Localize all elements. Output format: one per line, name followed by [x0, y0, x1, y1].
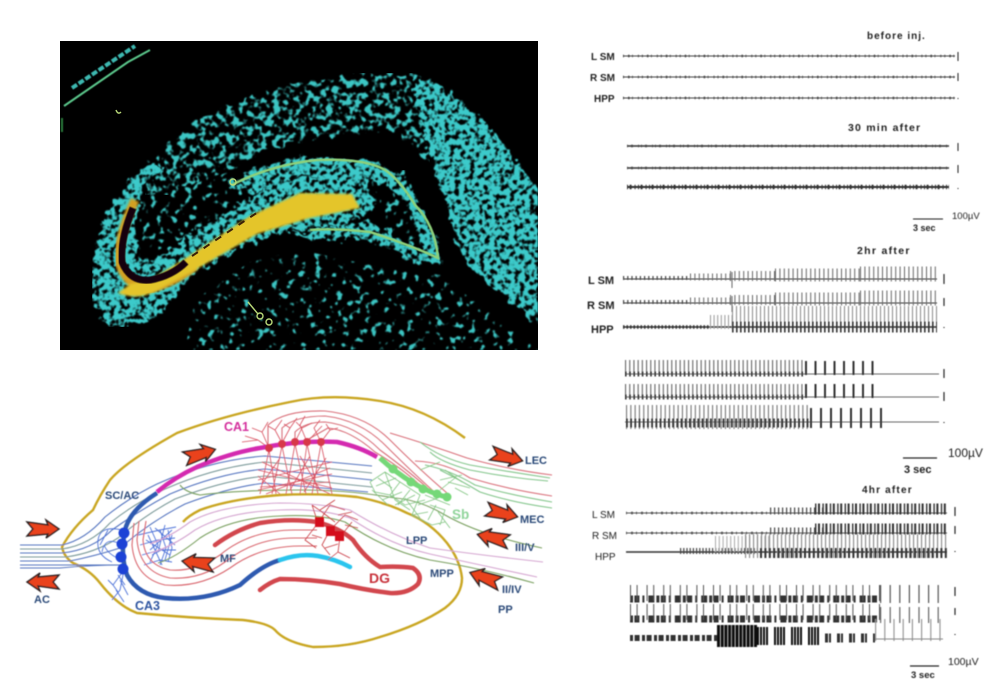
diagram: subiculum dendrites — [370, 462, 470, 528]
scale bar: 100µV — [952, 211, 980, 222]
diagram: CA3 basal dendrites — [98, 525, 176, 602]
micrograph: sparse speckled tissue — [138, 170, 538, 350]
channel labels: L SM — [591, 52, 615, 63]
micrograph: orange rim around dark core — [119, 200, 195, 288]
diagram labels: SC/AC — [105, 490, 139, 502]
section: 30 min after — [627, 122, 980, 233]
calibration ticks — [957, 52, 959, 99]
diagram labels: PP — [498, 604, 513, 616]
micrograph: small vessel rings — [116, 110, 272, 325]
HPP trace — [623, 319, 937, 327]
diagram labels: MEC — [520, 514, 544, 526]
heading: before inj.: before inj. — [867, 31, 926, 42]
diagram: CA3 blue band — [123, 493, 280, 599]
diagram labels: II/IV — [502, 584, 522, 596]
diagram labels: LPP — [406, 535, 427, 547]
continuation traces — [630, 593, 943, 639]
L SM trace — [626, 509, 947, 513]
L SM trace — [623, 272, 937, 288]
diagram labels: III/V — [515, 542, 535, 554]
R SM trace — [626, 529, 947, 533]
channel labels — [590, 52, 615, 105]
heading: 4hr after: 4hr after — [862, 485, 913, 496]
diagram: CA1 pyramidal dendrites — [242, 416, 338, 494]
arrow: AC output — [27, 573, 59, 591]
scale bar: 100µV — [948, 656, 979, 668]
diagram labels: MPP — [430, 568, 454, 580]
continuation traces — [625, 367, 939, 423]
diagram: CA3 cell bodies — [116, 528, 130, 574]
arrow: MEC — [484, 500, 520, 526]
diagram: subiculum cell bodies — [388, 464, 452, 502]
traces — [627, 146, 949, 187]
diagram: perforant path fibres, pink and green — [150, 485, 543, 583]
diagram: subiculum green band — [380, 458, 450, 498]
channel labels: HPP — [591, 324, 614, 336]
channel labels: R SM — [590, 73, 615, 84]
diagram: dentate granule cell dendrites — [305, 500, 358, 560]
diagram labels: Sb — [452, 507, 469, 522]
calibration ticks — [954, 507, 956, 552]
arrow: left input — [27, 520, 59, 538]
diagram: commissural and Schaffer fibres — [20, 456, 372, 568]
calibration ticks — [954, 587, 956, 635]
micrograph: dark saturated core — [122, 208, 186, 280]
channel labels: L SM — [588, 275, 614, 287]
panel: EEG traces — [587, 31, 983, 681]
micrograph: yellow-green dentate lines — [232, 160, 438, 258]
section: 4 hr after — [592, 485, 979, 681]
arrow: II/IV — [467, 564, 503, 592]
diagram: entorhinal and subicular fibres — [268, 411, 552, 508]
calibration ticks — [957, 143, 959, 189]
channel labels: R SM — [587, 300, 614, 312]
section: 2 hr after — [587, 245, 983, 476]
diagram labels — [34, 420, 547, 616]
diagram labels: DG — [369, 570, 390, 586]
scale bar: 3 sec — [911, 670, 935, 681]
diagram labels: CA1 — [224, 420, 249, 434]
channel labels: HPP — [595, 552, 616, 563]
diagram: CA1 magenta band — [157, 442, 377, 492]
diagram: CA1 cell bodies — [265, 438, 325, 452]
channel labels: R SM — [592, 531, 617, 542]
diagram: dentate granule cells — [315, 517, 344, 541]
micrograph: medium speckled upper band — [145, 73, 430, 195]
heading: 2hr after: 2hr after — [857, 245, 911, 257]
diagram labels: MF — [220, 553, 236, 565]
scale bar — [910, 656, 979, 681]
diagram: dentate gyrus red band — [215, 520, 420, 593]
diagram labels: LEC — [525, 455, 547, 467]
arrow: CA1 direction — [182, 441, 218, 467]
arrow: MF direction — [181, 552, 215, 574]
HPP trace — [626, 544, 947, 553]
section: before injection — [590, 31, 958, 105]
scale bar: 3 sec — [913, 223, 936, 233]
channel labels — [592, 510, 617, 563]
panel: fluorescence micrograph of hippocampus — [60, 41, 538, 350]
diagram: outer gold outline — [62, 397, 465, 647]
diagram: mossy fibres — [132, 521, 317, 585]
calibration ticks — [943, 369, 945, 423]
scale bar: 3 sec — [904, 464, 932, 476]
diagram labels: CA3 — [135, 599, 160, 613]
scale bar — [903, 446, 983, 476]
channel labels — [587, 275, 614, 336]
heading: 30 min after: 30 min after — [848, 122, 921, 134]
scale bar — [913, 211, 980, 233]
micrograph: thin fibre streak — [62, 46, 150, 132]
channel labels: HPP — [594, 94, 615, 105]
micrograph: yellow pyramidal layer — [118, 193, 360, 296]
arrow: III/V — [475, 526, 511, 550]
diagram: cyan CA2-side band — [280, 555, 350, 567]
micrograph: dark dashes along layer — [192, 212, 258, 256]
arrow: LEC — [489, 444, 525, 470]
panel: hippocampal circuit diagram — [20, 397, 552, 647]
traces — [623, 56, 955, 98]
micrograph: dense cyan cell layers — [92, 73, 538, 327]
calibration ticks — [943, 274, 945, 328]
scale bar: 100µV — [948, 446, 983, 460]
diagram labels: AC — [34, 594, 50, 606]
channel labels: L SM — [592, 510, 615, 521]
R SM trace — [623, 296, 937, 312]
